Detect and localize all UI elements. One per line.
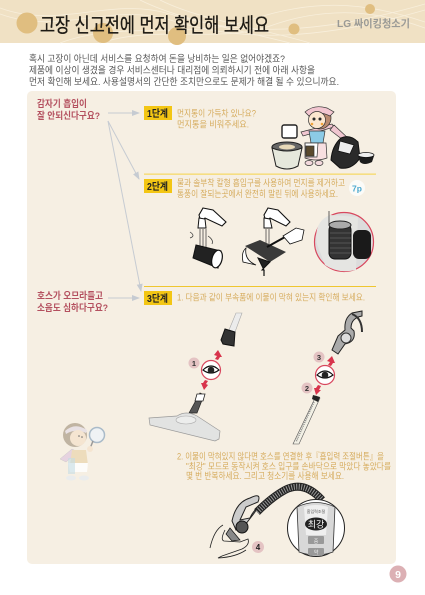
- illustration: dried filter inset: [314, 211, 374, 272]
- illustration: handle and extension pipe: [293, 311, 362, 444]
- marker 1: [188, 358, 200, 368]
- marker 4: [252, 541, 264, 553]
- marker 2: [302, 382, 312, 394]
- arrows from questions to steps: [108, 113, 141, 298]
- step 3 text 1: 1. 다음과 같이 부속품에 이물이 막혀 있는지 확인해 보세요.: [177, 292, 365, 302]
- question: hose: 소음도 심하다구요?: [37, 302, 108, 314]
- bucket: [272, 142, 302, 169]
- title: 고장 신고전에 먼저 확인해 보세요: [40, 14, 269, 37]
- step 3 label: 3단계: [147, 292, 168, 305]
- question: hose: [37, 290, 108, 314]
- inset: suction control button: 중: [314, 539, 319, 545]
- illustration: hose with handle and hand: [210, 487, 322, 558]
- marker 3: [314, 352, 324, 362]
- step 1 label: 1단계: [147, 107, 168, 120]
- step 3 text 2: "최강" 모드로 동작시켜 호스 입구를 손바닥으로 막았다 놓았다를: [186, 460, 391, 472]
- product name: LG 싸이킹청소기: [337, 17, 410, 30]
- marker 1: 1: [192, 359, 196, 368]
- header band: [0, 0, 425, 45]
- inset: suction control button: 최강: [308, 520, 324, 530]
- step 2 label: [144, 179, 172, 193]
- step 2 label: 2단계: [147, 180, 168, 193]
- intro text: [29, 53, 339, 88]
- vacuum body: [331, 137, 374, 168]
- inset: suction control button: 약: [314, 549, 319, 556]
- question: suction: 잘 안되신다구요?: [37, 110, 100, 122]
- illustration: girl with magnifier: [60, 423, 104, 480]
- page reference badge: 7p: [349, 180, 365, 196]
- girl: [282, 107, 350, 166]
- illustration: pipe and floor nozzle: [149, 313, 242, 441]
- step 1 text: 먼지통이 가득차 있나요?: [177, 108, 256, 118]
- marker 2: 2: [305, 384, 309, 393]
- red arrows for check 1: [201, 350, 222, 390]
- step divider lines: [144, 174, 376, 287]
- illustration: girl emptying dust bin: [272, 107, 374, 169]
- icon: eye check 1: [202, 360, 220, 380]
- inset: suction control button: 흡입력조절: [307, 508, 326, 514]
- question: suction: [37, 98, 100, 122]
- illustration: washing filter under tap: [190, 208, 226, 269]
- red arrows for check 2: [314, 356, 335, 395]
- inset: suction control button: [288, 500, 344, 556]
- step 3 label: [144, 291, 172, 305]
- illustration: brushing filter under tap: [242, 208, 304, 276]
- intro text: 먼저 확인해 보세요. 사용설명서의 간단한 조치만으로도 문제가 해결 될 수 있으니까요.: [29, 76, 339, 88]
- step 1 text: 먼지통을 비워주세요.: [177, 120, 249, 130]
- main panel: [27, 91, 396, 564]
- step 2 text: 물과 솔부착 칼형 흡입구를 사용하여 먼지를 제거하고: [177, 177, 345, 188]
- intro text: 혹시 고장이 아닌데 서비스를 요청하여 돈을 낭비하는 일은 없어야겠죠?: [29, 53, 285, 65]
- step 2 text: 통풍이 잘되는곳에서 완전히 말린 뒤에 사용하세요.: [177, 188, 338, 199]
- question: hose: 호스가 오므라들고: [37, 290, 103, 302]
- step 3 text 2: 2. 이물이 막혀있지 않다면 호스를 연결한 후『흡입력 조절버튼』을: [177, 450, 384, 462]
- page reference badge: 7p: 7p: [352, 184, 362, 194]
- marker 4: 4: [256, 543, 261, 552]
- question: suction: 감자기 흡입이: [37, 98, 87, 110]
- marker 3: 3: [317, 353, 321, 362]
- step 2 text: [177, 177, 345, 199]
- step 1 label: [144, 106, 172, 120]
- step 3 text 2: [177, 450, 391, 481]
- step 3 text 2: 몇 번 반복하세요. 그리고 청소기를 사용해 보세요.: [186, 471, 344, 481]
- icon: eye check 2: [316, 366, 334, 384]
- page number: [390, 566, 406, 582]
- step 1 text: [177, 108, 256, 130]
- intro text: 제품에 이상이 생겼을 경우 서비스센터나 대리점에 의뢰하시기 전에 아래 사항을: [29, 64, 315, 76]
- page number: 9: [395, 569, 401, 581]
